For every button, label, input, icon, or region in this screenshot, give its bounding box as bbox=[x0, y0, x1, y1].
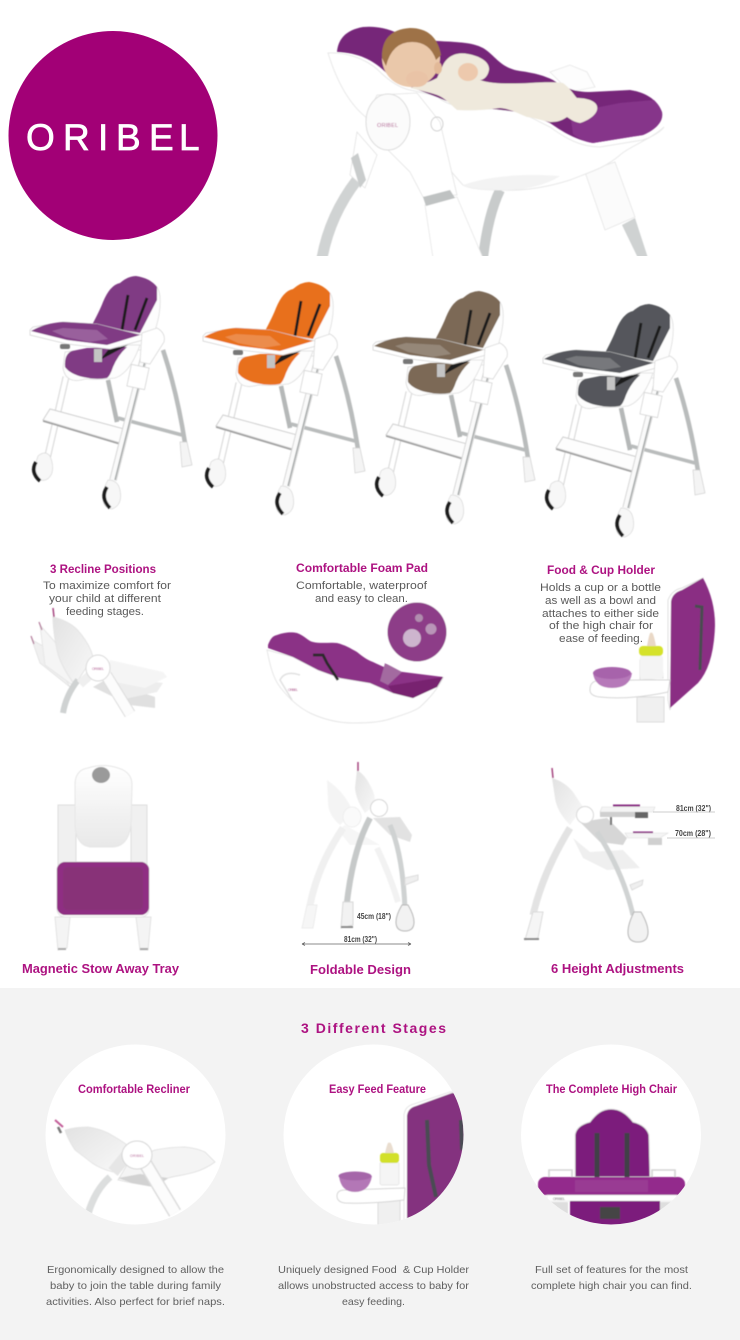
feature: 6 height adjustments bbox=[524, 768, 715, 976]
stage text: complete chair: complete high chair you can find. bbox=[531, 1280, 692, 1292]
description: feeding stages. bbox=[66, 606, 144, 618]
description: attaches to either side bbox=[542, 608, 659, 620]
stage text: complete chair bbox=[531, 1264, 692, 1292]
stage text: recliner: Ergonomically designed to allow the bbox=[47, 1264, 224, 1276]
heading: 3 Recline Positions bbox=[50, 564, 156, 576]
circle backdrop bbox=[284, 1044, 464, 1224]
product row: four colour variants bbox=[30, 276, 705, 537]
chair: grey bbox=[543, 304, 705, 537]
illustration: chair folded bbox=[302, 762, 418, 931]
dimension: 81cm width arrow: 81cm (32") bbox=[344, 935, 377, 944]
heading: Food & Cup Holder bbox=[547, 565, 656, 577]
description bbox=[296, 580, 428, 605]
illustration: folded tray front view bbox=[55, 766, 151, 950]
recliner illustration bbox=[55, 1120, 215, 1214]
description: your child at different bbox=[49, 593, 161, 605]
stage text: recliner: baby to join the table during family bbox=[50, 1280, 222, 1292]
chair: brown bbox=[373, 291, 535, 524]
description bbox=[43, 580, 171, 618]
feature: magnetic stow away tray bbox=[22, 766, 179, 976]
description: of the high chair for bbox=[549, 620, 653, 632]
stage text: recliner bbox=[46, 1264, 225, 1308]
stage text: easy feed bbox=[278, 1264, 470, 1308]
recliner illustration: ORIBEL bbox=[130, 1154, 144, 1158]
hero hub with logo bbox=[366, 93, 457, 206]
panel: 3 different stages bbox=[0, 988, 740, 1340]
description: Comfortable, waterproof bbox=[296, 580, 428, 592]
dimension: 81cm: 81cm (32") bbox=[676, 804, 711, 813]
feature: 3 recline positions bbox=[31, 564, 171, 714]
description: ease of feeding. bbox=[559, 633, 643, 645]
stage: the complete high chair bbox=[521, 1044, 701, 1229]
feature: foldable design bbox=[302, 762, 418, 977]
illustration: chair side view with trays bbox=[524, 768, 668, 942]
heading: Comfortable Foam Pad bbox=[296, 563, 428, 575]
stage title: Easy Feed Feature bbox=[329, 1084, 426, 1096]
logo: ORIBEL circle bbox=[8, 31, 218, 240]
stage text: easy feed: easy feeding. bbox=[342, 1296, 405, 1308]
illustration: holder with bottle and bowl bbox=[590, 578, 715, 722]
illustration: water beads callout bbox=[383, 601, 448, 667]
description: To maximize comfort for bbox=[43, 580, 171, 592]
feature: comfortable foam pad bbox=[267, 563, 448, 723]
stage: comfortable recliner bbox=[46, 1044, 226, 1224]
stage text: recliner: activities. Also perfect for brief naps. bbox=[46, 1296, 225, 1308]
circle backdrop bbox=[46, 1044, 226, 1224]
panel background bbox=[0, 988, 740, 1340]
dimension: 81cm width arrow bbox=[302, 935, 411, 946]
dimension: 45cm: 45cm (18") bbox=[357, 912, 391, 921]
hero chair legs bbox=[322, 132, 648, 258]
high chair front illustration: ORIBEL bbox=[553, 1197, 565, 1201]
dimension: 70cm: 70cm (28") bbox=[675, 829, 711, 838]
description: and easy to clean. bbox=[315, 593, 408, 605]
hero purple cushion bbox=[337, 27, 662, 143]
stage text: easy feed: Uniquely designed Food & Cup Holder bbox=[278, 1264, 470, 1276]
stage text: complete chair: Full set of features for the most bbox=[535, 1264, 688, 1276]
feature: food and cup holder bbox=[540, 565, 715, 722]
circle backdrop bbox=[521, 1044, 701, 1224]
stage text: easy feed: allows unobstructed access to baby for bbox=[278, 1280, 470, 1292]
description: as well as a bowl and bbox=[545, 595, 656, 607]
caption: Magnetic Stow Away Tray bbox=[22, 962, 179, 976]
high chair front illustration bbox=[538, 1109, 685, 1229]
panel heading: 3 Different Stages bbox=[301, 1020, 446, 1036]
description: Holds a cup or a bottle bbox=[540, 582, 661, 594]
hero seat shell bbox=[328, 53, 664, 190]
illustration: recline leaves: ORIBEL bbox=[92, 667, 104, 671]
stage: easy feed feature bbox=[284, 1044, 470, 1230]
baby bbox=[382, 28, 597, 123]
dimension: 81cm bbox=[653, 804, 715, 813]
hero photo: baby in reclined chair bbox=[322, 27, 664, 258]
logo: ORIBEL circle: ORIBEL bbox=[26, 117, 200, 158]
chair: orange bbox=[203, 282, 365, 515]
illustration: seat pad bbox=[267, 632, 443, 723]
caption: Foldable Design bbox=[310, 963, 411, 977]
illustration: seat pad: ORIBEL bbox=[288, 688, 298, 692]
holder illustration bbox=[337, 1090, 470, 1230]
hero hub with logo: ORIBEL bbox=[377, 123, 398, 129]
illustration: recline leaves bbox=[31, 608, 167, 714]
stage title: The Complete High Chair bbox=[546, 1084, 677, 1096]
description bbox=[540, 582, 661, 645]
caption: 6 Height Adjustments bbox=[551, 962, 684, 976]
stage title: Comfortable Recliner bbox=[78, 1084, 190, 1096]
chair: purple bbox=[30, 276, 192, 509]
